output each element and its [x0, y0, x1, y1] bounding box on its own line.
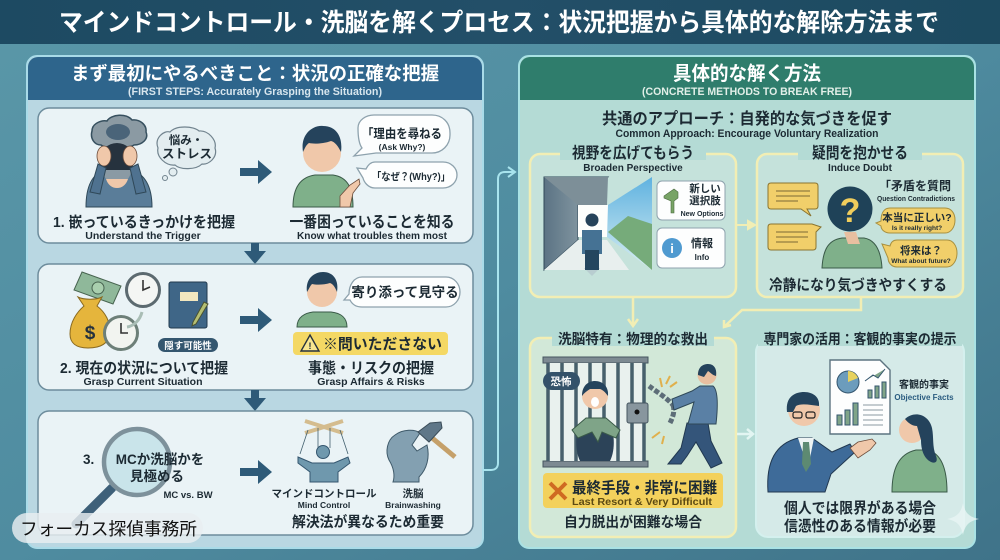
- icon: watching person: [297, 272, 347, 327]
- callout: info: Info: [695, 253, 709, 262]
- risk label: [308, 359, 434, 388]
- step 2 label: 2. 現在の状況について把握: [60, 359, 228, 377]
- bubble: really right: 本当に正しい?: [882, 211, 952, 224]
- bubble: really right: Is it really right?: [892, 225, 942, 232]
- callout: new options: New Options: [681, 211, 723, 218]
- arrow: [240, 160, 272, 184]
- watermark: [12, 513, 203, 543]
- illustration: woman listening: [892, 414, 947, 492]
- icon: brainwashing hammer: [387, 422, 455, 482]
- label: objective facts: Objective Facts: [894, 393, 954, 402]
- brainwashing label: 洗脳: [402, 487, 424, 500]
- step 3 label: 見極める: [130, 469, 184, 484]
- step 3 label: 3.: [83, 452, 94, 467]
- common approach heading: 共通のアプローチ：自発的な気づきを促す: [602, 109, 892, 128]
- callout: new options: 選択肢: [689, 194, 721, 207]
- callout: info: [657, 228, 725, 268]
- left panel header: まず最初にやるべきこと：状況の正確な把握: [71, 63, 439, 84]
- speech bubble: why: [357, 162, 457, 188]
- method: broaden perspective: 視野を広げてもらう: [572, 144, 694, 162]
- banner: last resort: Last Resort & Very Difficult: [572, 496, 713, 508]
- right panel header: [520, 57, 974, 100]
- method: induce doubt: Induce Doubt: [828, 163, 893, 174]
- arrow down: [244, 390, 266, 411]
- step 2 card: [38, 264, 473, 390]
- thought bubble: stress: [157, 127, 216, 180]
- method: induce doubt: [757, 143, 963, 297]
- finding label: Know what troubles them most: [297, 230, 447, 242]
- speech bubble: ask why: (Ask Why?): [379, 142, 426, 152]
- tag: hiding possibility: 隠す可能性: [164, 340, 212, 352]
- text: question contradictions: 「矛盾を質問: [879, 178, 951, 193]
- caption: 信憑性のある情報が必要: [784, 517, 936, 535]
- caption: 自力脱出が困難な場合: [564, 514, 702, 530]
- icon: person with question mark: [822, 186, 882, 268]
- common approach heading: Common Approach: Encourage Voluntary Realization: [616, 128, 879, 140]
- speech bubble: ask why: [354, 115, 450, 156]
- icon: money and clocks: $: [85, 323, 96, 344]
- risk label: Grasp Affairs & Risks: [317, 376, 425, 388]
- method: physical rescue: 洗脳特有：物理的な救出: [558, 331, 708, 347]
- method: experts: 専門家の活用：客観的事実の提示: [764, 331, 956, 347]
- step 3 label: [83, 452, 213, 501]
- label: objective facts: 客観的事実: [899, 378, 949, 391]
- arrow down: perspective to rescue: [628, 297, 638, 326]
- step 2 label: Grasp Current Situation: [83, 376, 203, 388]
- brainwashing label: [385, 487, 441, 510]
- arrow between methods: [737, 221, 755, 229]
- step 1 card: [38, 108, 473, 243]
- bubble: future: 将来は？: [900, 244, 942, 257]
- mind control label: [272, 488, 377, 510]
- step 1 label: [53, 214, 235, 242]
- speech bubble: watch over: [344, 277, 460, 307]
- illustration: corridor and landscape: [544, 177, 652, 276]
- arrow: [240, 308, 272, 332]
- step 3 label: MC vs. BW: [163, 490, 213, 501]
- step 1 label: Understand the Trigger: [85, 230, 201, 242]
- text: question contradictions: [877, 178, 955, 203]
- risk label: 事態・リスクの把握: [308, 359, 434, 377]
- sparkle: [947, 503, 979, 535]
- method: experts: [756, 331, 964, 537]
- step 1 label: 1. 嵌っているきっかけを把握: [53, 214, 235, 231]
- step 3 card: [38, 411, 473, 535]
- bubble: future: What about future?: [891, 258, 951, 265]
- bubble: really right: [876, 208, 955, 233]
- banner: last resort: [543, 473, 723, 508]
- illustration: rescuer breaking chains: [649, 364, 722, 468]
- brainwashing label: Brainwashing: [385, 500, 441, 510]
- thought bubble: stress: ストレス: [162, 147, 212, 161]
- arrow: rescue to experts: [737, 429, 753, 439]
- title bar: マインドコントロール・洗脳を解くプロセス：状況把握から具体的な解除方法まで: [59, 9, 939, 37]
- bubble: future: [882, 240, 957, 267]
- icon: distressed person: [86, 115, 152, 207]
- illustration: expert: [768, 392, 876, 492]
- finding label: 一番困っていることを知る: [290, 212, 454, 231]
- icon: yellow speech bubbles: [768, 183, 821, 250]
- right panel header: 具体的な解く方法: [673, 62, 821, 85]
- icon: notebook and pen: [169, 282, 208, 328]
- icon: puppet: [298, 421, 350, 482]
- connector arrow: [483, 167, 515, 470]
- callout: info: 情報: [691, 236, 713, 250]
- finding label: [290, 212, 454, 242]
- right panel header: (CONCRETE METHODS TO BREAK FREE): [642, 86, 852, 98]
- tag: hiding possibility: [158, 338, 218, 352]
- caption: [784, 499, 936, 535]
- warning banner: [293, 332, 448, 355]
- callout: info: i: [670, 241, 674, 256]
- panel: concrete methods: [519, 56, 975, 548]
- label: fear: [543, 372, 580, 390]
- title bar: [0, 0, 1000, 44]
- thought bubble: stress: 悩み・: [169, 133, 203, 147]
- banner: last resort: 最終手段・非常に困難: [572, 478, 717, 497]
- callout: new options: 新しい: [689, 182, 721, 195]
- left panel header: (FIRST STEPS: Accurately Grasping the Situation): [128, 86, 382, 98]
- left panel header: [28, 57, 482, 100]
- illustration: cage: [543, 357, 648, 467]
- step 2 label: [60, 359, 228, 388]
- note: important: 解決法が異なるため重要: [292, 513, 444, 531]
- mind control label: Mind Control: [298, 500, 350, 510]
- method: induce doubt: 疑問を抱かせる: [812, 143, 908, 162]
- arrow down: [244, 243, 266, 264]
- caption: 個人では限界がある場合: [784, 499, 936, 517]
- warning banner: ※問いたださない: [323, 336, 442, 353]
- step 3 label: MCか洗脳かを: [116, 452, 204, 467]
- icon: person asking why: [293, 126, 360, 207]
- speech bubble: ask why: 「理由を尋ねる: [362, 126, 442, 141]
- method: physical rescue: [530, 331, 736, 537]
- icon: person with question mark: ?: [840, 192, 860, 230]
- method: broaden perspective: [530, 144, 736, 297]
- watermark: フォーカス探偵事務所: [20, 519, 197, 539]
- caption: 冷静になり気づきやすくする: [769, 276, 947, 294]
- warning banner: !: [308, 341, 312, 351]
- speech bubble: why: 「なぜ？(Why?)」: [372, 170, 450, 183]
- icon: magnifier: [76, 429, 170, 524]
- callout: new options: [657, 181, 725, 220]
- label: fear: 恐怖: [550, 375, 572, 388]
- panel: first steps: [27, 56, 483, 548]
- mind control label: マインドコントロール: [272, 488, 377, 500]
- speech bubble: watch over: 寄り添って見守る: [351, 284, 459, 300]
- arrow: doubt to rescue: [724, 297, 861, 327]
- method: broaden perspective: Broaden Perspective: [583, 163, 683, 174]
- illustration: document with charts: [830, 360, 890, 434]
- icon: money and clocks: [70, 272, 160, 350]
- arrow: [240, 460, 272, 484]
- label: objective facts: [894, 378, 954, 402]
- text: question contradictions: Question Contradictions: [877, 196, 955, 203]
- common approach heading: [602, 109, 892, 140]
